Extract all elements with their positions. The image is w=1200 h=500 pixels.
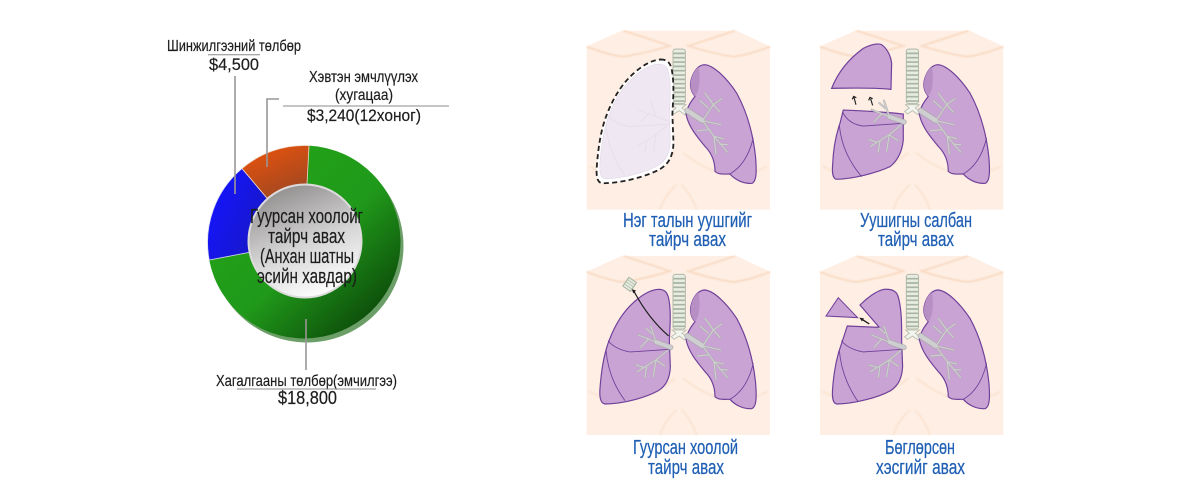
segment: surgery cost [209,146,401,338]
caption: тайрч авах [878,229,954,251]
illustration: lung removed [587,31,770,210]
label: examination cost [167,38,301,74]
caption: Бөглөрсөн [885,437,955,459]
illustration: wedge removed [820,256,1003,435]
segment: examination cost [208,168,304,260]
leader line: surgery [305,319,307,370]
caption: хэсгийг авах [876,457,965,479]
leader line: hospital stay [267,99,279,167]
label: hospital stay: Хэвтэн эмчлүүлэх [309,69,418,86]
label: examination cost: $4,500 [209,55,259,74]
segment: hospital stay [242,145,309,242]
centre label: тайрч авах [268,226,345,248]
leader line: examination [234,76,236,194]
panel: lobe removal [820,31,1003,251]
label: surgery cost: $18,800 [278,388,337,408]
caption [633,437,738,479]
caption: тайрч авах [648,457,724,479]
caption: Нэг талын уушгийг [623,210,752,232]
panel: bronchus removal [587,256,770,479]
label: hospital stay [283,69,449,125]
caption [860,210,972,251]
caption: тайрч авах [649,229,726,251]
illustration: lobe removed [820,31,1003,210]
centre disc [248,184,362,298]
caption: Уушигны салбан [860,210,972,232]
centre label: Гуурсан хоолойг [250,206,363,228]
panel: wedge removal [820,256,1003,479]
label: examination cost: Шинжилгээний төлбөр [167,38,301,55]
donut chart [208,145,404,342]
label: hospital stay: (хугацаа) [335,87,393,104]
label: surgery cost [216,373,397,408]
panel: whole lung removal [587,31,770,251]
centre label [250,206,363,288]
centre label: (Анхан шатны [260,246,354,268]
label: hospital stay: $3,240(12хоног) [307,106,421,125]
label: surgery cost: Хагалгааны төлбөр(эмчилгээ) [216,373,397,390]
centre label: эсийн хавдар) [257,266,357,288]
illustration: bronchus sleeve removed [587,256,770,435]
caption [876,437,965,479]
caption [623,210,752,251]
caption: Гуурсан хоолой [633,437,738,459]
donut shadow [210,150,404,342]
